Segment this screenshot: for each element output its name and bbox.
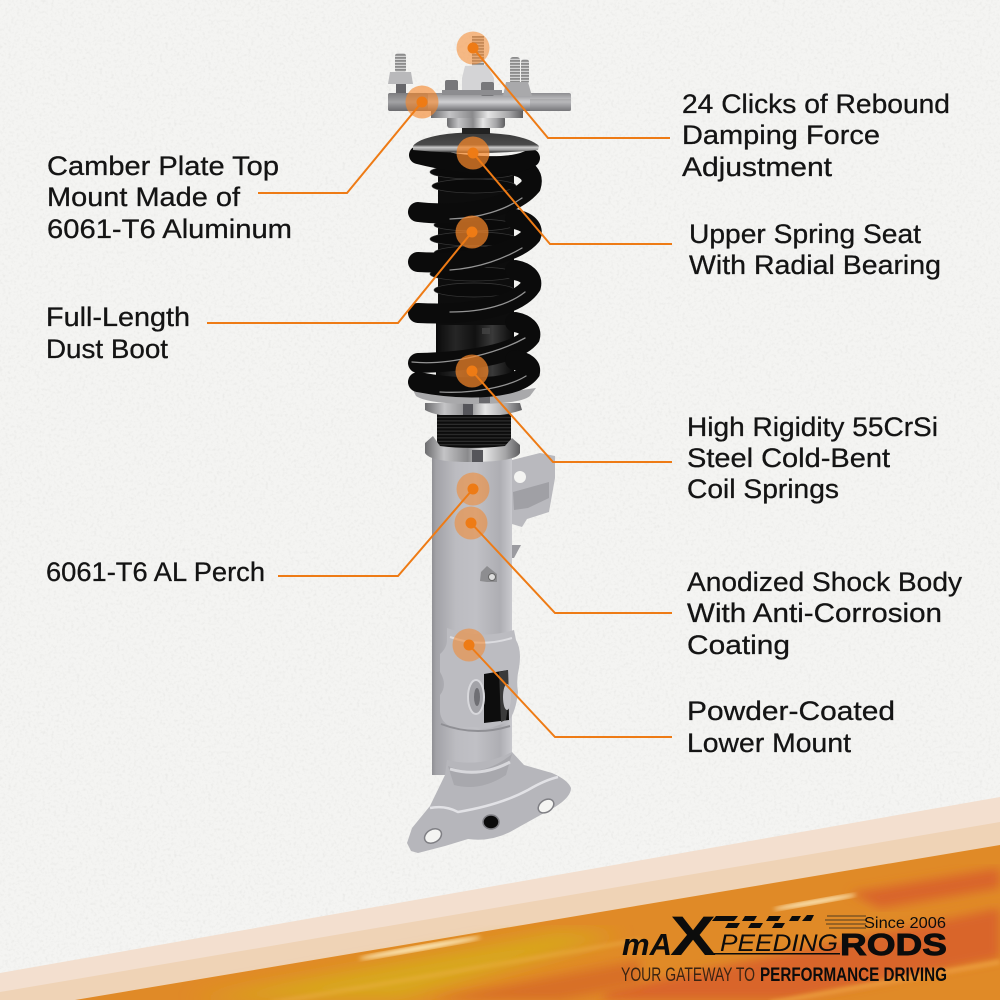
logo tagline: YOUR GATEWAY TO [621, 965, 755, 986]
bottom mounting flange [407, 752, 571, 853]
callout: camber plate: 6061-T6 Aluminum [47, 214, 292, 244]
callout: anodized shock body: With Anti-Corrosion [687, 598, 942, 628]
callout: coil springs: High Rigidity 55CrSi [687, 412, 938, 442]
logo speed lines [825, 916, 866, 928]
logo wordmark: PEEDING [720, 930, 838, 957]
brand logo: PERFORMANCE DRIVING [760, 965, 947, 986]
logo wordmark: RODS [840, 927, 947, 962]
callout: lower mount [452, 628, 895, 758]
callout: upper spring seat: With Radial Bearing [689, 250, 941, 280]
upper spring seat [413, 132, 539, 153]
callout: dust boot: Dust Boot [46, 334, 169, 364]
callout: dust boot: Full-Length [46, 302, 190, 332]
threaded sleeve and perch collars [412, 388, 536, 462]
black coil spring [412, 155, 532, 392]
inner cylinder and dust boot [430, 160, 518, 390]
logo wordmark [622, 904, 947, 967]
callout: AL perch: 6061-T6 AL Perch [46, 557, 265, 587]
callout: camber plate: Mount Made of [47, 182, 241, 212]
callout: camber plate: Camber Plate Top [47, 151, 279, 181]
callout: rebound adjustment: Adjustment [682, 152, 833, 182]
callout: coil springs: Coil Springs [687, 474, 839, 504]
callout: lower mount: Lower Mount [687, 728, 852, 758]
logo since date: Since 2006 [864, 915, 946, 932]
callout: rebound adjustment: Damping Force [682, 120, 880, 150]
callout: upper spring seat [456, 136, 941, 280]
logo wordmark: mA [622, 927, 672, 962]
logo checkered flag [712, 915, 814, 928]
callout: coil springs: Steel Cold-Bent [687, 443, 891, 473]
callout: coil springs [456, 354, 938, 504]
brand logo [621, 904, 947, 986]
lower shock body [432, 453, 555, 775]
callout: lower mount: Powder-Coated [687, 696, 895, 726]
callout: upper spring seat: Upper Spring Seat [689, 219, 922, 249]
callout: anodized shock body: Anodized Shock Body [687, 567, 963, 597]
radial bearing and hub [431, 108, 523, 134]
logo wordmark: X [670, 904, 716, 967]
product: coilover strut [388, 36, 571, 853]
callout: anodized shock body [454, 506, 963, 660]
camber plate studs and nuts [388, 36, 532, 96]
callout: anodized shock body: Coating [687, 630, 790, 660]
callout: camber plate [47, 86, 438, 244]
callout: dust boot [46, 216, 488, 364]
callout: AL perch [46, 472, 490, 587]
callout: rebound adjustment: 24 Clicks of Rebound [682, 89, 950, 119]
callout: rebound adjustment [456, 32, 950, 182]
camber plate [388, 93, 571, 111]
diagonal orange footer band [0, 797, 1000, 1000]
